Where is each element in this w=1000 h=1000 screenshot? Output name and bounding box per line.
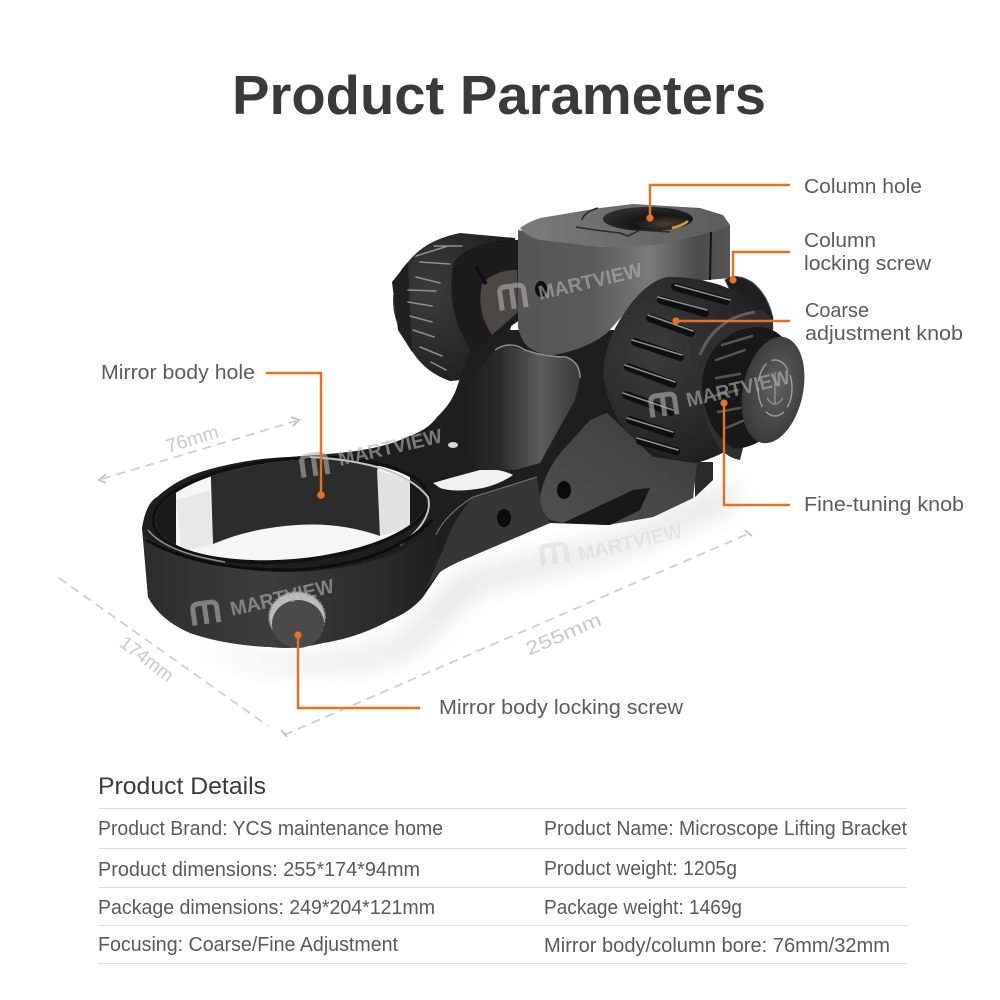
callout: column locking screw: Column bbox=[804, 230, 876, 252]
arm screw holes bbox=[448, 442, 511, 527]
arm opening bbox=[433, 470, 513, 490]
column head body bbox=[518, 204, 730, 355]
row 1 bbox=[98, 818, 907, 840]
callout: column hole bbox=[646, 176, 922, 222]
watermark: arm: MARTVIEW bbox=[336, 426, 445, 471]
callout: mirror body locking screw: Mirror body locking screw bbox=[439, 697, 684, 719]
ring locking screw bbox=[269, 592, 325, 648]
lower mount plate bbox=[540, 413, 713, 525]
callout: coarse adjustment knob: Coarse bbox=[805, 300, 869, 322]
coarse adjustment knob bbox=[603, 277, 773, 463]
shadow under bracket bbox=[190, 480, 740, 670]
centre plate bbox=[465, 345, 580, 470]
watermark: coarse knob bbox=[650, 367, 793, 418]
row 2 bbox=[98, 858, 737, 881]
callout: coarse adjustment knob bbox=[672, 300, 963, 345]
heading: product details: Product Details bbox=[98, 773, 266, 800]
ring outer band face bbox=[143, 527, 445, 648]
bracket arm and ring band silhouette bbox=[142, 330, 697, 648]
title: Product Parameters bbox=[232, 64, 766, 126]
row 4 bbox=[98, 934, 890, 957]
left adjustment knob bbox=[392, 233, 520, 381]
row 4: Mirror body/column bore: 76mm/32mm bbox=[544, 935, 890, 957]
watermark: ring band bbox=[192, 576, 337, 626]
row 2: Product dimensions: 255*174*94mm bbox=[98, 859, 420, 881]
callout: mirror body hole: Mirror body hole bbox=[101, 362, 255, 384]
ring opening bbox=[146, 456, 433, 572]
watermark: arm bbox=[301, 426, 445, 478]
dimension: 255mm bbox=[281, 530, 752, 737]
row 3: Package weight: 1469g bbox=[544, 897, 742, 919]
dimension: 76mm bbox=[99, 417, 299, 483]
callout: fine-tuning knob: Fine-tuning knob bbox=[804, 494, 964, 516]
row 3 bbox=[98, 897, 742, 919]
watermark: column head: MARTVIEW bbox=[536, 260, 645, 305]
column hole bbox=[603, 207, 693, 231]
row 3: Package dimensions: 249*204*121mm bbox=[98, 897, 435, 919]
dimension: 174mm: 174mm bbox=[115, 633, 177, 687]
knob cap bbox=[732, 331, 814, 449]
row 4: Focusing: Coarse/Fine Adjustment bbox=[98, 934, 398, 956]
watermark: column head bbox=[499, 260, 645, 310]
fine-tuning knob bbox=[702, 327, 814, 449]
callout: mirror body locking screw bbox=[294, 631, 684, 719]
callout: fine-tuning knob bbox=[720, 399, 964, 516]
row 1: Product Brand: YCS maintenance home bbox=[98, 818, 443, 840]
callout: column locking screw bbox=[729, 230, 932, 284]
row 2: Product weight: 1205g bbox=[544, 858, 737, 880]
callout: mirror body hole bbox=[101, 362, 325, 499]
watermarks bbox=[192, 260, 793, 626]
watermark: coarse knob: MARTVIEW bbox=[684, 367, 793, 412]
callout: coarse adjustment knob: adjustment knob bbox=[805, 323, 963, 345]
details table bbox=[98, 808, 907, 964]
dimension: 174mm bbox=[59, 578, 268, 726]
watermark: below bracket: MARTVIEW bbox=[576, 521, 685, 566]
callout: column locking screw: locking screw bbox=[804, 253, 932, 275]
dimension: 255mm: 255mm bbox=[523, 610, 605, 660]
rear column locking screw bbox=[725, 276, 773, 320]
product illustration: microscope lifting bracket bbox=[142, 204, 814, 670]
row 1: Product Name: Microscope Lifting Bracket bbox=[544, 818, 907, 840]
callout: column hole: Column hole bbox=[804, 176, 922, 198]
lower arm strip bbox=[425, 477, 550, 590]
dimension: 76mm: 76mm bbox=[164, 422, 221, 458]
watermark: ring band: MARTVIEW bbox=[228, 576, 337, 621]
top face bbox=[520, 204, 730, 247]
